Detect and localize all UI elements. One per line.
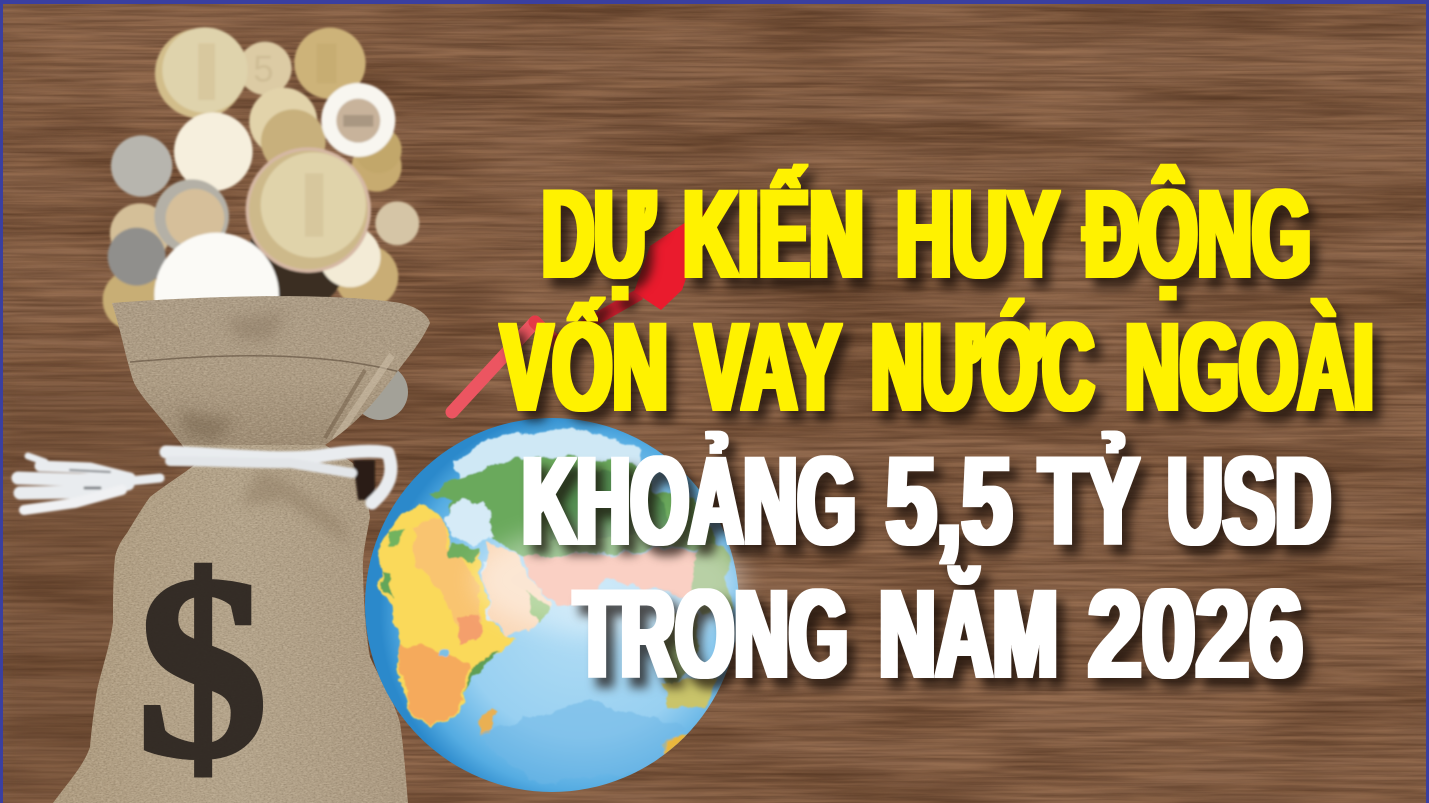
line 4: white: NĂM [879,565,1058,704]
line 4: white: 2026 [1088,565,1303,704]
line 4: white: TRONG [574,565,848,704]
line 2: yellow: VỐN [501,298,668,437]
icon: pile of coins [103,27,419,357]
line 3: white: KHOẢNG [522,432,856,571]
South East Asia [690,547,730,613]
white haze behind the white lines [475,525,745,635]
icon: white rope and tassel [18,451,391,510]
icon: earth globe [365,418,745,792]
line 1: yellow [542,165,1311,304]
Madagascar [477,708,497,735]
Arabia and Middle East [483,543,553,637]
line 3: white: TỶ [1039,432,1139,571]
line 3: white [522,432,1331,571]
line 4: white [574,565,1303,704]
Arctic ice and north coast [453,428,643,482]
Central Asia [523,550,697,607]
line 1: yellow: KIẾN [683,165,864,304]
Indian Ocean shading [477,700,683,783]
line 3: white: 5,5 [886,432,1012,571]
line 2: yellow: NƯỚC [871,298,1094,437]
line 2: yellow: VAY [696,298,841,437]
title with drop shadow [501,165,1374,704]
line 2: yellow [501,298,1374,437]
line 1: yellow: DỰ [542,165,654,304]
icon: coin peeking out behind the bag [352,364,408,420]
Mediterranean and Europe [445,500,497,543]
Australia [660,677,717,708]
line 1: yellow: HUY [896,165,1059,304]
icon: burlap money bag [40,285,440,803]
icon: pile of coins: 5 [253,49,274,90]
Africa [377,504,518,731]
line 3: white: USD [1167,432,1331,571]
Russia and northern Asia [430,455,717,557]
red rising arrow [452,205,712,412]
